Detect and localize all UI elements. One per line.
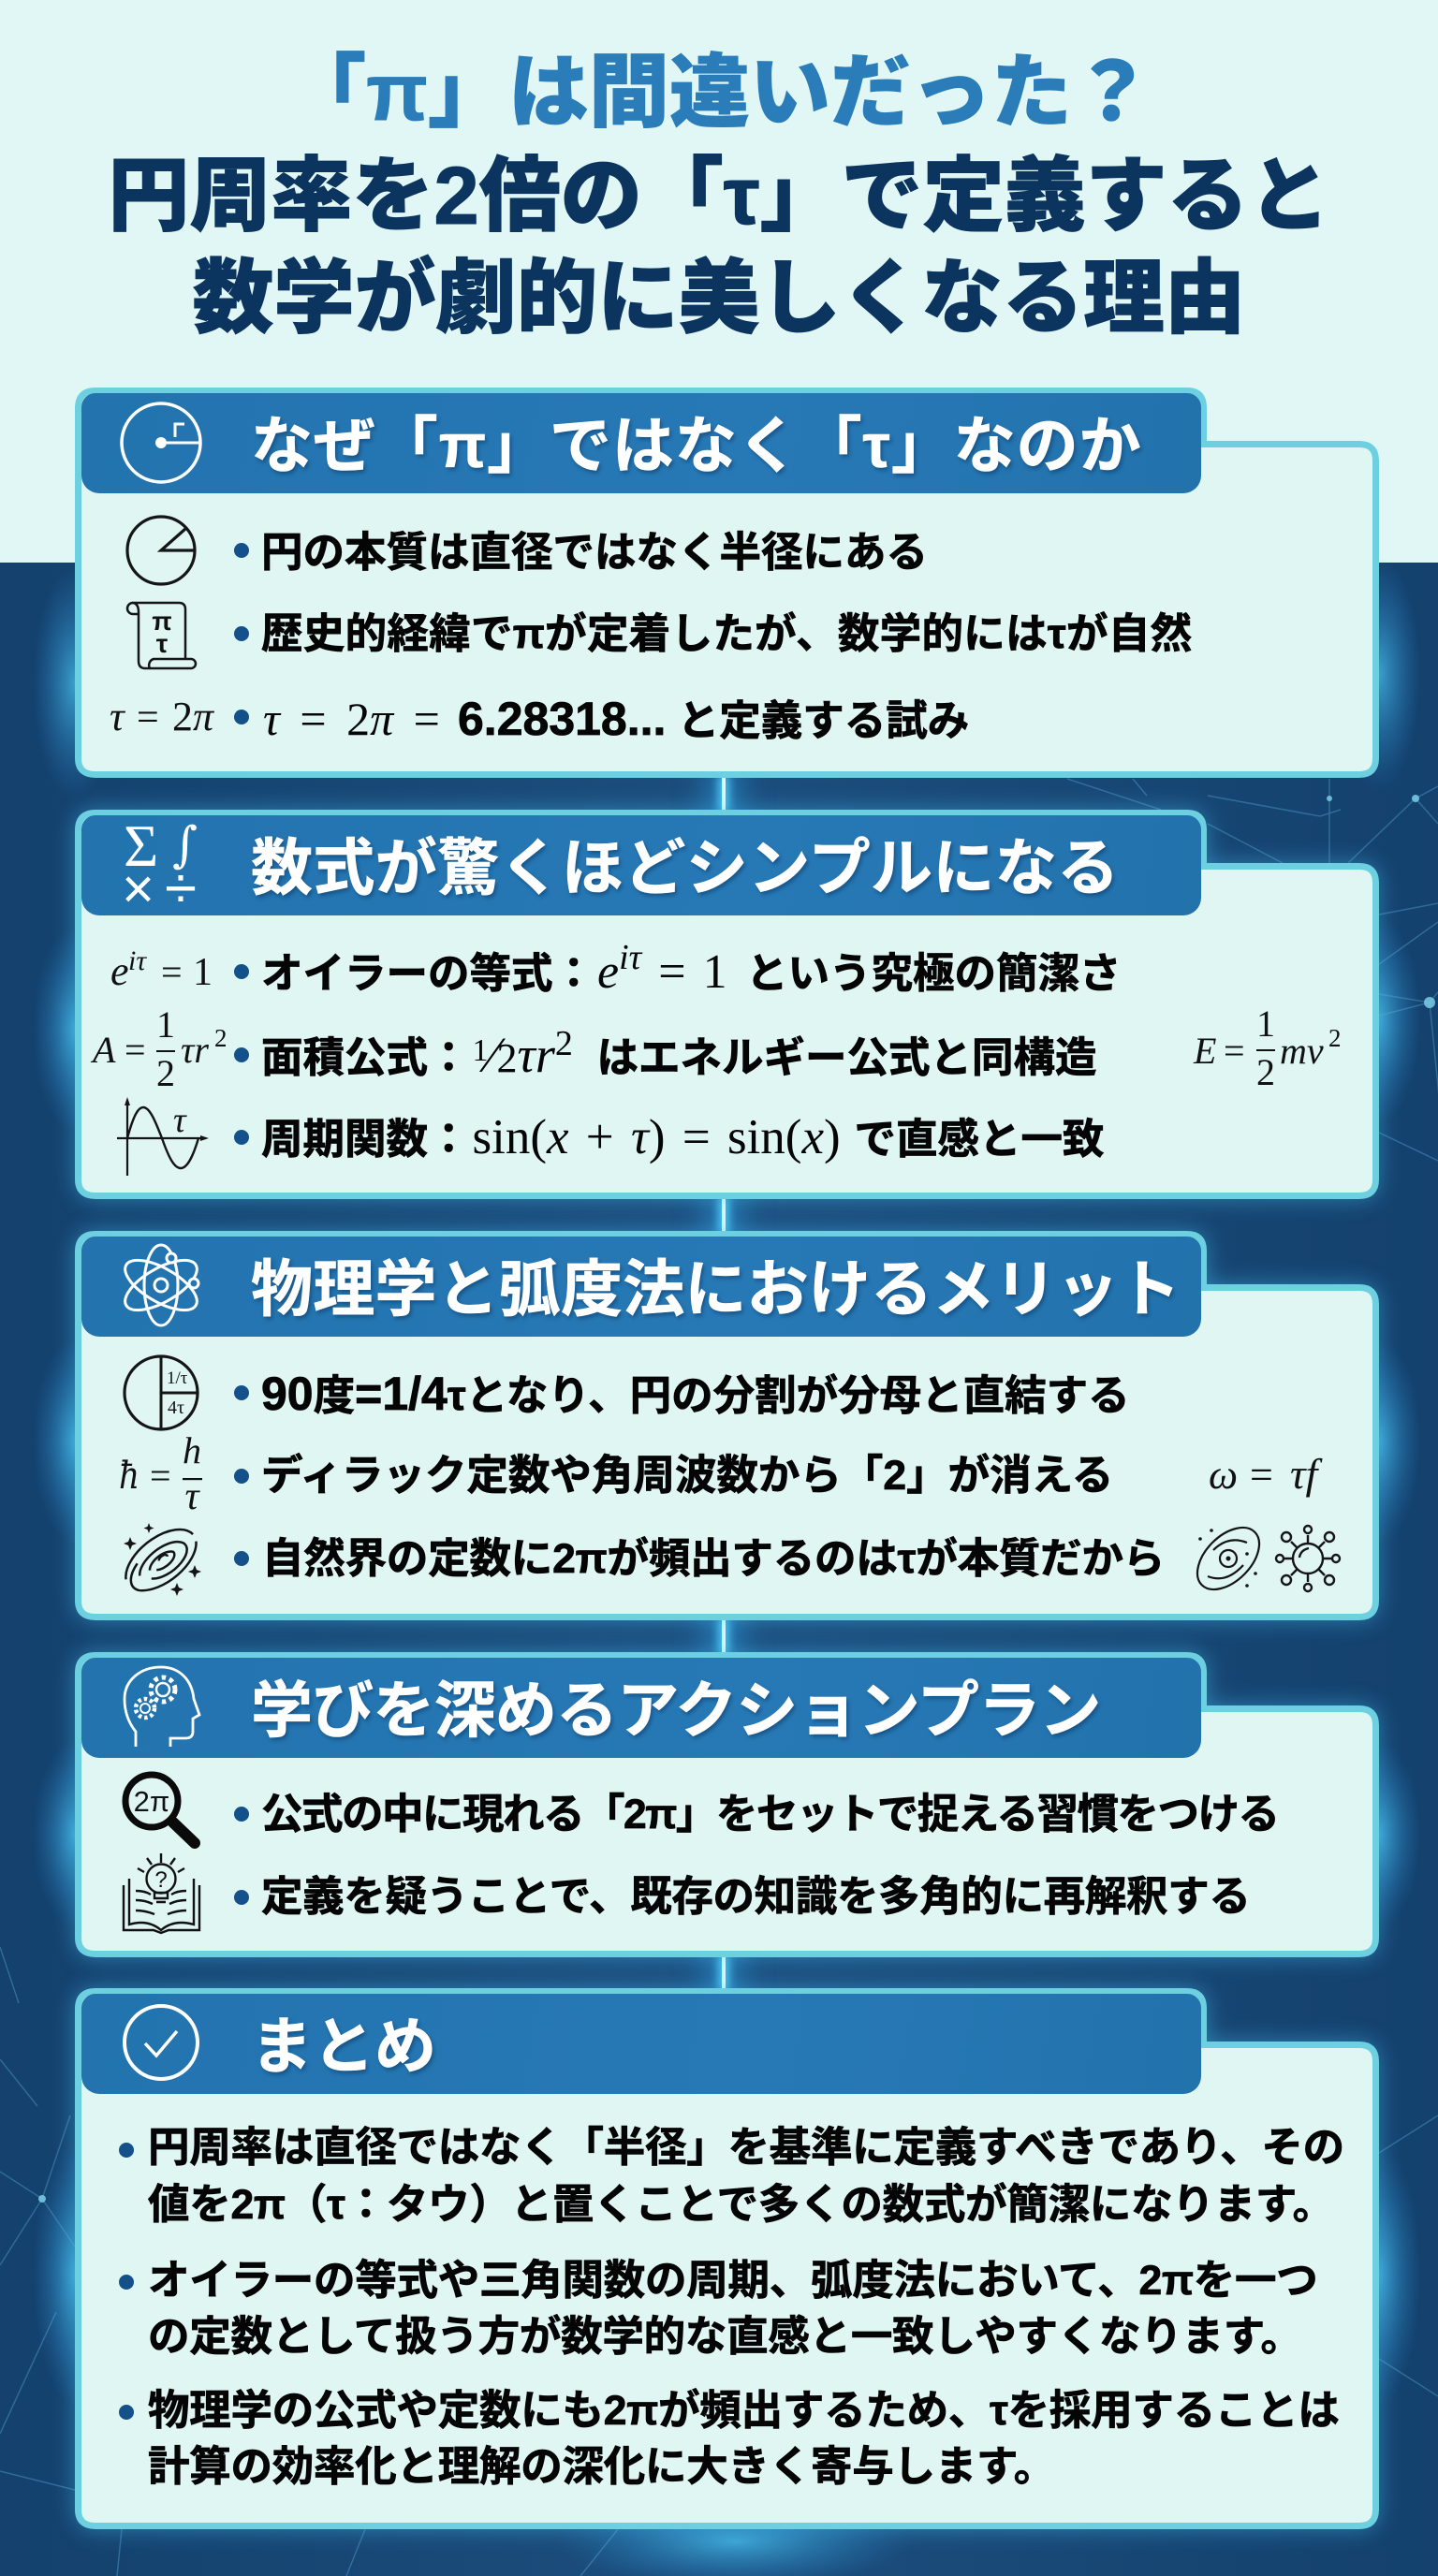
heading: 学びを深めるアクションプラン: [251, 1676, 1101, 1745]
text: euler: eiτ = 1: [597, 938, 727, 999]
text: periodic: sin(x + τ) = sin(x): [473, 1110, 841, 1164]
icon: math symbols: ∫: [172, 817, 198, 873]
text: nature: 自然界の定数に2πが頻出するのはτが本質だから: [262, 1536, 1165, 1582]
formula: hbar: [116, 1432, 206, 1515]
panel: why tau: [75, 388, 1379, 778]
formula: energy: 2: [1328, 1024, 1341, 1052]
summary point 2: [112, 2245, 1367, 2376]
connector: panel 4 to 5: [722, 1957, 726, 1988]
text: area: 面積公式： はエネルギー公式と同構造: [261, 1035, 1097, 1081]
formula: euler: e: [110, 948, 129, 994]
icon: magnifier with 2 pi: [120, 1769, 204, 1853]
bullet: [234, 1807, 249, 1822]
formula: euler: 1: [193, 951, 213, 994]
formula: area: 1: [156, 1003, 175, 1046]
icon: galaxy: [120, 1512, 206, 1609]
formula: energy: [1189, 1008, 1348, 1089]
heading: 数式が驚くほどシンプルになる: [251, 833, 1120, 902]
text: definition: τ = 2π =: [263, 693, 440, 745]
icon: scroll: π: [152, 607, 172, 636]
icon: math symbols: [122, 812, 198, 921]
icon: math symbols: Σ: [124, 812, 158, 879]
header bar: [81, 393, 1201, 493]
summary point 3: [112, 2375, 1367, 2506]
formula: hbar: h: [183, 1429, 201, 1471]
icon: sine wave: [115, 1095, 211, 1178]
heading: まとめ: [251, 2012, 436, 2081]
text: definition: 6.28318... と定義する試み: [458, 693, 969, 745]
line: 物理学の公式や定数にも2πが頻出するため、τを採用することは: [148, 2388, 1340, 2434]
formula: energy: 1: [1256, 1003, 1275, 1045]
bullet: [119, 2405, 134, 2420]
panel: action plan: [75, 1652, 1379, 1957]
formula: area: 2: [156, 1052, 175, 1094]
text: area: 1⁄2τr2: [473, 1024, 573, 1083]
header bar: [81, 815, 1201, 915]
text: periodic: 周期関数： で直感と一致: [261, 1117, 1105, 1163]
text: redefine: 定義を疑うことで、既存の知識を多角的に再解釈する: [261, 1874, 1251, 1920]
formula: hbar: τ: [184, 1475, 200, 1518]
formula: energy: 2: [1256, 1051, 1275, 1093]
formula: euler: [110, 945, 213, 994]
formula: hbar: =: [150, 1455, 171, 1497]
summary point 1: [112, 2112, 1367, 2243]
text: habit: 公式の中に現れる「2π」をセットで捉える習慣をつける: [261, 1792, 1279, 1837]
formula: area: τr: [181, 1029, 209, 1071]
icon: math symbols: ×: [122, 857, 154, 920]
text: ninety degrees: 90度=1/4τとなり、円の分割が分母と直結する: [261, 1368, 1130, 1420]
bullet: [234, 1130, 249, 1145]
text: history: 歴史的経緯でπが定着したが、数学的にはτが自然: [261, 611, 1192, 657]
panel: summary: [75, 1988, 1379, 2529]
icon: sine wave: τ: [173, 1101, 187, 1140]
line: 値を2π（τ：タウ）と置くことで多くの数式が簡潔になります。: [148, 2182, 1334, 2228]
title: [108, 48, 1330, 344]
heading: なぜ「π」ではなく「τ」なのか: [251, 411, 1142, 480]
text: radius: 円の本質は直径ではなく半径にある: [261, 530, 928, 576]
header bar: [81, 1658, 1201, 1758]
formula: tau equals two pi: τ: [110, 694, 126, 739]
formula: omega: τf: [1290, 1450, 1323, 1498]
formula: omega: =: [1250, 1452, 1273, 1498]
formula: area: =: [125, 1029, 146, 1071]
title line 3: 数学が劇的に美しくなる理由: [193, 254, 1245, 344]
icon: magnifier with 2 pi: 2π: [134, 1785, 169, 1818]
title line 2: 円周率を2倍の「τ」で定義すると: [108, 151, 1330, 242]
icon: book with light bulb: ?: [154, 1867, 168, 1893]
bullet: [234, 1385, 249, 1400]
formula: hbar: ħ: [119, 1455, 139, 1498]
icon: check circle: [122, 2001, 200, 2086]
icon: orbit: [1194, 1516, 1278, 1601]
bullet: [234, 1890, 249, 1905]
heading: 物理学と弧度法におけるメリット: [251, 1254, 1181, 1324]
icon: network hub: [1273, 1521, 1348, 1596]
icon: circle with radius: [120, 402, 202, 484]
line: の定数として扱う方が数学的な直感と一致しやすくなります。: [148, 2314, 1302, 2360]
icon: quarter circle: 4τ: [168, 1398, 184, 1418]
formula: euler: =: [161, 951, 183, 993]
icon: atom: [117, 1238, 205, 1332]
formula: omega: ω: [1209, 1452, 1238, 1498]
formula: area: [90, 1003, 227, 1094]
icon: scroll: τ: [156, 629, 169, 658]
icon: head with gears: [120, 1661, 204, 1755]
formula: tau equals two pi: [110, 694, 215, 739]
text: dirac: ディラック定数や角周波数から「2」が消える: [261, 1453, 1113, 1499]
line: 計算の効率化と理解の深化に大きく寄与します。: [148, 2444, 1055, 2490]
formula: energy: =: [1224, 1030, 1245, 1072]
formula: omega: [1208, 1454, 1329, 1500]
connector: panel 1 to 2: [722, 778, 726, 810]
formula: tau equals two pi: 2π: [172, 694, 215, 739]
panel: simple formulas: [63, 798, 1391, 1211]
bullet: [234, 1047, 249, 1062]
icon: quarter circle: 1/τ: [167, 1368, 188, 1388]
header bar: [81, 1237, 1201, 1337]
line: 円周率は直径ではなく「半径」を基準に定義すべきであり、その: [148, 2125, 1344, 2171]
formula: area: 2: [214, 1024, 227, 1052]
text: euler: オイラーの等式： という究極の簡潔さ: [261, 951, 1122, 997]
bullet: [119, 2143, 134, 2158]
bullet: [234, 1469, 249, 1484]
formula: area: A: [90, 1029, 116, 1071]
icon: circle sector: [125, 515, 197, 586]
formula: energy: E: [1193, 1030, 1216, 1072]
bullet: [234, 964, 249, 979]
panel: physics merits: [75, 1231, 1379, 1620]
title line 1: 「π」は間違いだった？: [286, 48, 1152, 138]
icon: book with light bulb: [120, 1858, 204, 1942]
dark lower background: [0, 563, 1438, 2576]
header bar: [81, 1994, 1201, 2094]
formula: energy: mv: [1280, 1030, 1324, 1072]
bullet: [234, 710, 249, 724]
bullet: [234, 626, 249, 641]
bullet: [234, 543, 249, 558]
icon: scroll: [125, 601, 197, 670]
formula: tau equals two pi: =: [137, 696, 159, 739]
bullet: [234, 1551, 249, 1566]
connector: panel 2 to 3: [722, 1199, 726, 1231]
connector: panel 3 to 4: [722, 1620, 726, 1652]
formula: euler: iτ: [128, 945, 147, 976]
icon: math symbols: ÷: [165, 856, 197, 921]
icon: quarter circle: [120, 1353, 202, 1433]
line: オイラーの等式や三角関数の周期、弧度法において、2πを一つ: [148, 2258, 1318, 2304]
bullet: [119, 2275, 134, 2290]
